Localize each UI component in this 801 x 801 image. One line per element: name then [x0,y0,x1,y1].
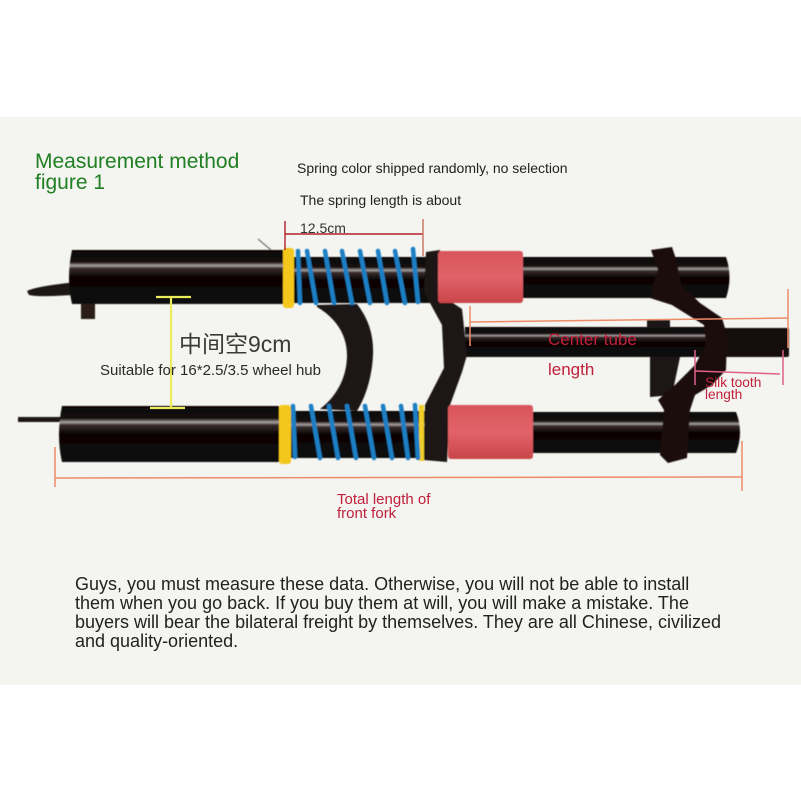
left crown [424,250,467,462]
spring length note: The spring length is about [300,192,461,208]
right crown [650,247,727,463]
wheel hub note: Suitable for 16*2.5/3.5 wheel hub [100,362,321,379]
warning paragraph: buyers will bear the bilateral freight by themselves. They are all Chinese, civilized [75,612,721,632]
upper blue spring [298,249,418,303]
center tube length marker [470,289,788,348]
lower outer tube [59,406,279,462]
small wire [258,239,271,250]
lower inner tube [288,411,428,458]
spring color note: Spring color shipped randomly, no selection [297,160,568,176]
thread length label line 2: length [705,387,742,402]
warning paragraph: and quality-oriented. [75,631,238,651]
upper outer tube [69,250,284,304]
photo background [0,117,801,685]
lower left tab [18,417,80,422]
upper red sleeve [438,251,523,303]
upper right tube [520,257,730,298]
bracket plate [650,357,680,397]
center tube [465,327,715,357]
spring length value: 12.5cm [300,220,346,236]
thread length marker [695,350,783,385]
gap label: 中间空9cm [179,331,291,357]
center tube label line 2: length [548,360,594,379]
total length label line 2: front fork [337,505,397,522]
gap marker [150,297,191,408]
center tube label: Center tube [548,330,637,349]
warning paragraph: them when you go back. If you buy them at will, you will make a mistake. The [75,593,689,613]
spring length marker [285,219,423,256]
yellow collars [283,248,294,308]
photo: front fork [18,239,789,464]
warning paragraph: Guys, you must measure these data. Otherwise, you will not be able to install [75,574,689,594]
upper left lug [27,280,90,296]
total length label: Total length of [337,491,431,508]
title: Measurement method [35,150,239,173]
thread length label: Silk tooth [705,375,761,390]
upper inner tube [290,257,430,303]
lower red sleeve [448,405,533,459]
warning paragraph [75,574,721,651]
lower blue spring [293,405,418,458]
fork arch [317,304,373,411]
lower right tube [530,412,740,453]
title line 2: figure 1 [35,171,105,194]
total length marker [55,441,742,491]
